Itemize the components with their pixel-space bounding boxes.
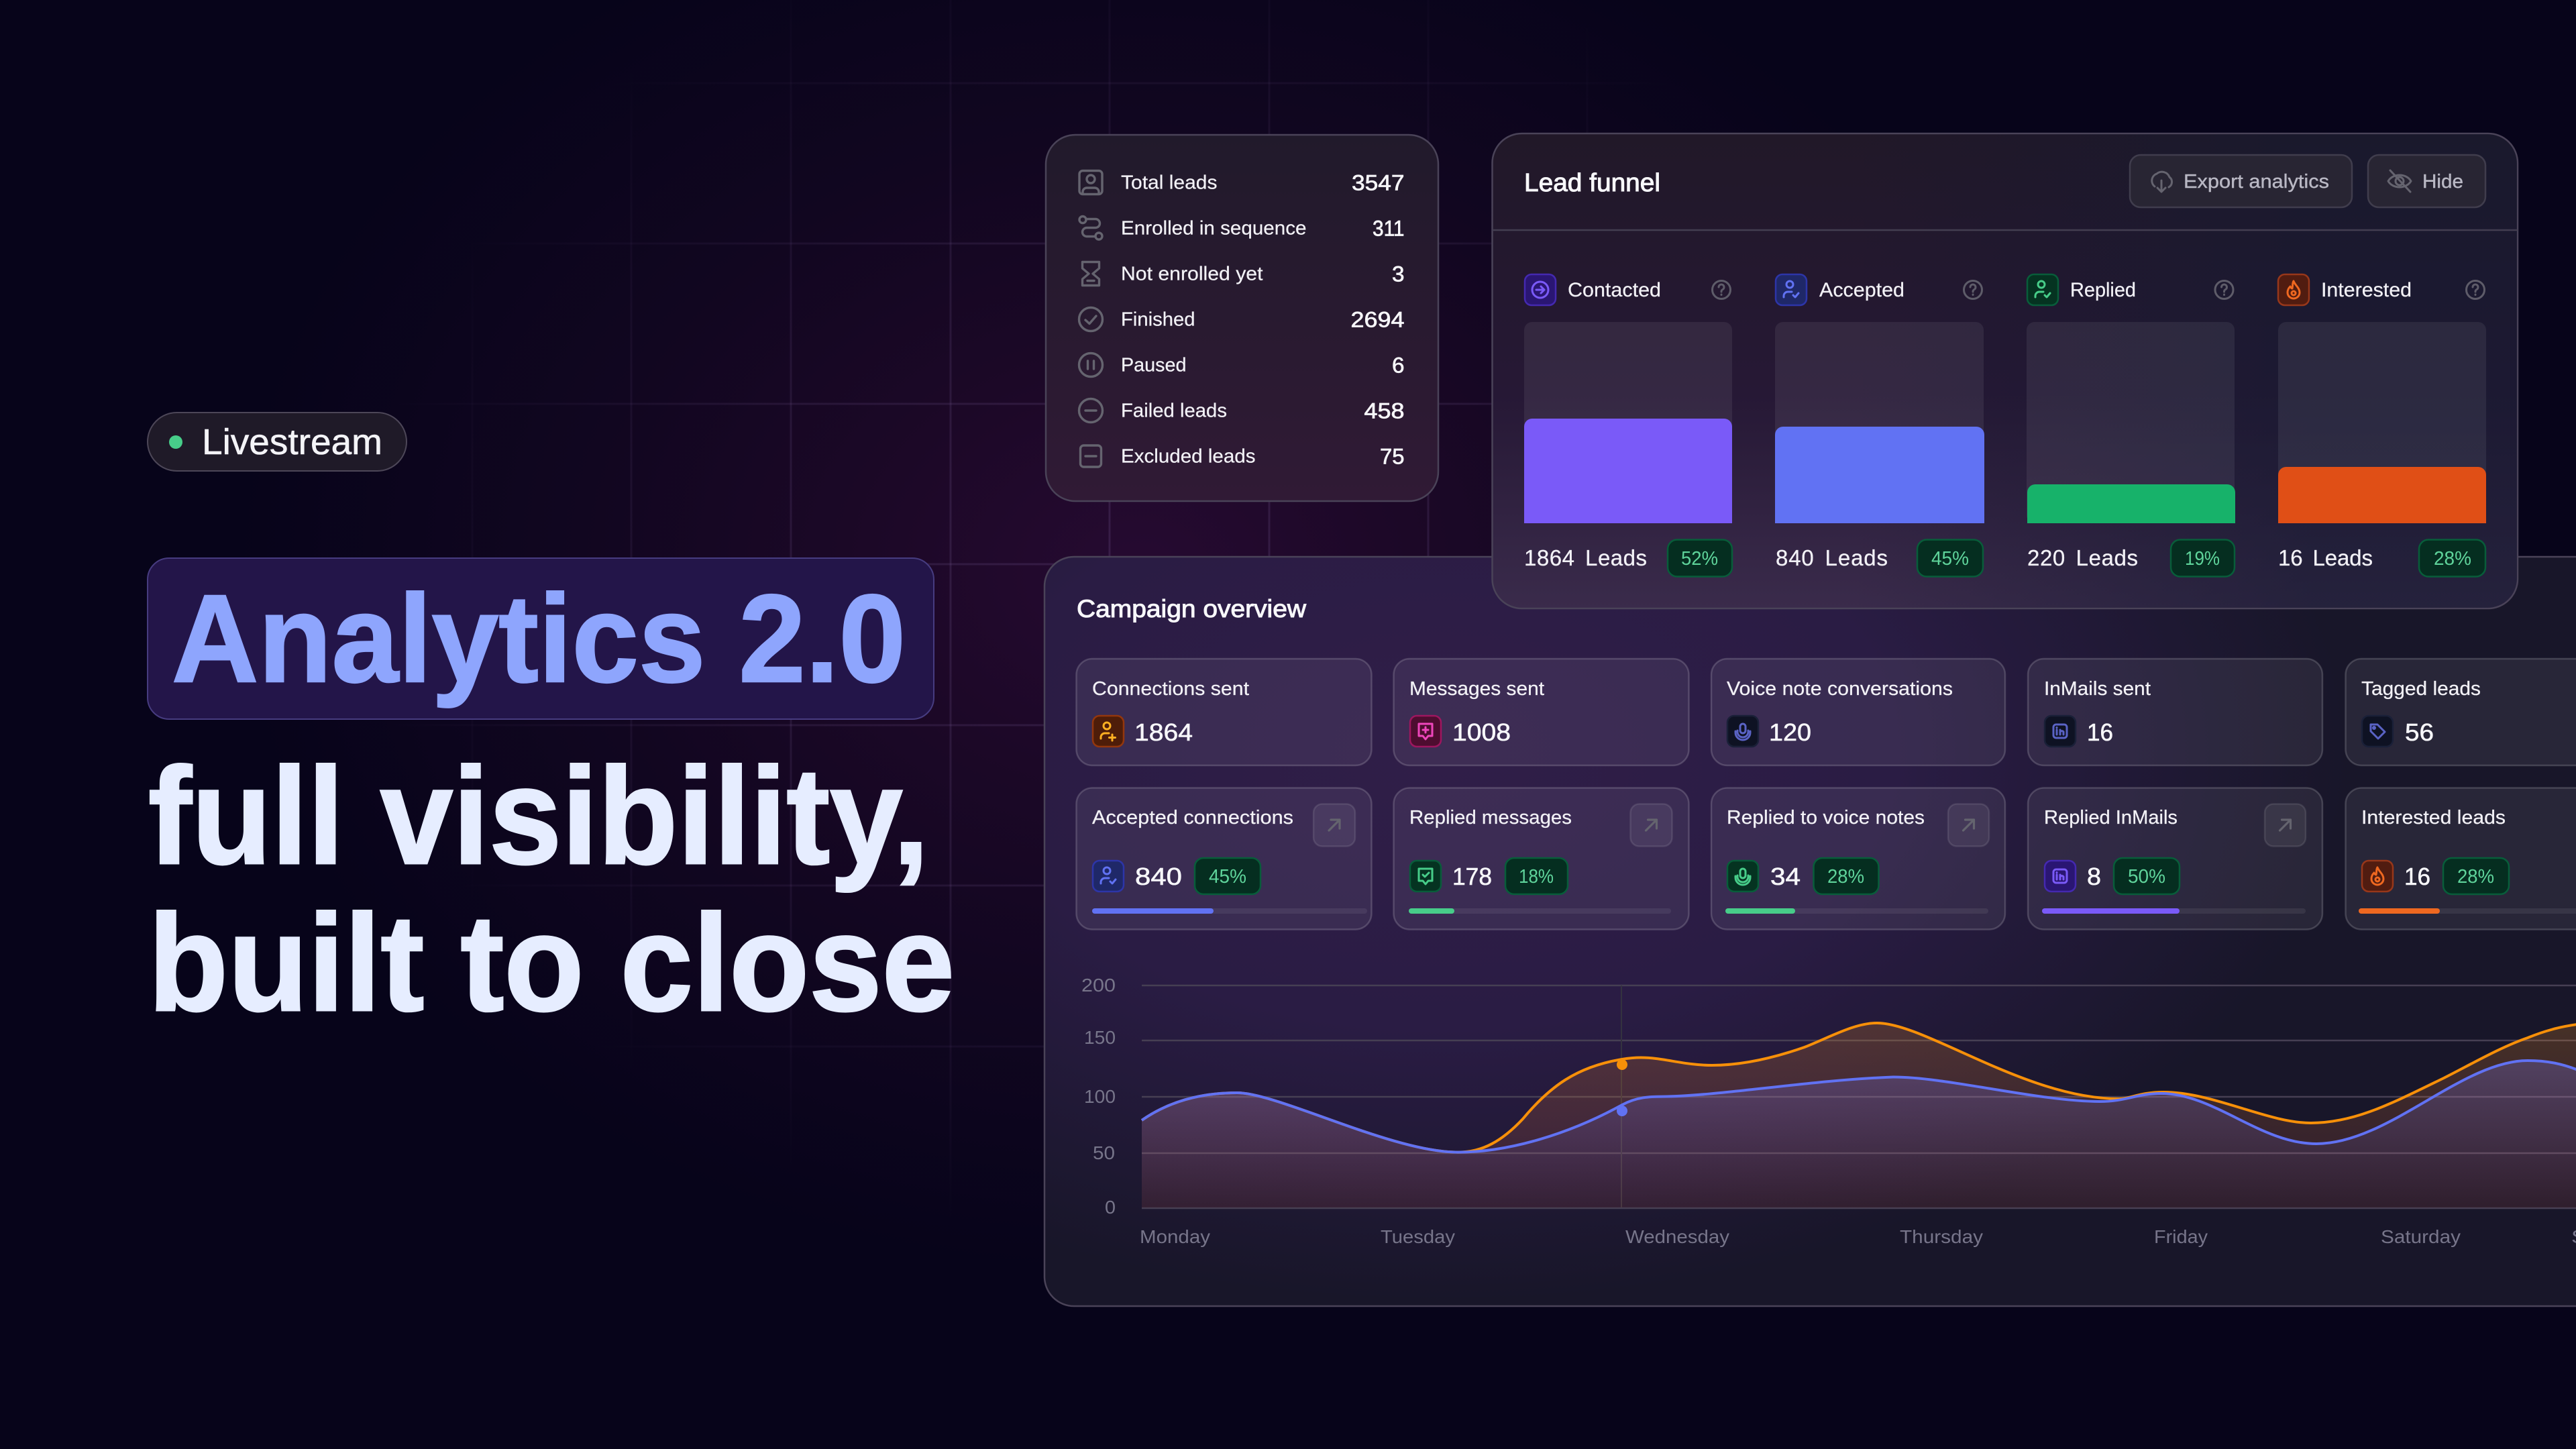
x axis labels: Friday — [2154, 1226, 2208, 1247]
card: interested leads: 16 — [2404, 863, 2430, 890]
card: connections sent: 1864 — [1134, 718, 1193, 746]
card: connections sent: Connections sent — [1092, 678, 1249, 700]
funnel column: replied — [2027, 274, 2235, 577]
card: replied inmails: 50% — [2128, 866, 2165, 888]
row: finished — [1079, 307, 1405, 331]
card: replied to voice notes: Replied to voice notes — [1727, 807, 1925, 828]
funnel column: replied: 220 Leads — [2027, 545, 2138, 570]
card: messages sent: Messages sent — [1409, 678, 1544, 700]
orange series line — [1142, 1023, 2576, 1152]
card: accepted connections — [1076, 788, 1371, 930]
blue data point — [1617, 1106, 1627, 1116]
headline line 1: full visibility, — [148, 739, 929, 893]
row: excluded leads: 75 — [1380, 444, 1405, 468]
card: tagged leads: Tagged leads — [2361, 678, 2481, 700]
row: paused: Paused — [1121, 354, 1186, 376]
row: total leads: Total leads — [1121, 172, 1217, 193]
row: enrolled in sequence — [1079, 216, 1405, 240]
panel: lead funnel — [1492, 133, 2518, 608]
row: finished: 2694 — [1351, 307, 1405, 331]
row: enrolled in sequence: Enrolled in sequence — [1121, 217, 1307, 239]
y axis labels: 100 — [1084, 1086, 1116, 1107]
funnel column: interested — [2278, 274, 2486, 577]
row: not enrolled yet: Not enrolled yet — [1121, 263, 1263, 284]
card: replied to voice notes: 28% — [1827, 866, 1864, 888]
funnel column: accepted: 840 Leads — [1776, 545, 1888, 570]
funnel column: replied: 19% — [2185, 548, 2220, 570]
card: replied inmails — [2028, 788, 2322, 930]
card: replied messages: Replied messages — [1409, 807, 1572, 828]
button: export analytics: Export analytics — [2184, 171, 2329, 193]
card: replied messages: 178 — [1452, 863, 1492, 890]
funnel column: replied: Replied — [2070, 279, 2136, 301]
card: interested leads — [2345, 788, 2576, 930]
livestream pill — [148, 413, 407, 471]
card: replied messages: 18% — [1519, 866, 1554, 888]
card: connections sent — [1076, 659, 1371, 765]
row: failed leads: 458 — [1364, 398, 1405, 423]
row: not enrolled yet — [1083, 262, 1405, 286]
funnel column: contacted: 52% — [1681, 548, 1718, 570]
heading: campaign overview: Campaign overview — [1077, 595, 1306, 623]
card: replied inmails: 8 — [2087, 863, 2101, 890]
livestream pill: Livestream — [202, 422, 382, 462]
card: voice note conversations: Voice note conversations — [1727, 678, 1953, 700]
funnel column: interested: 16 Leads — [2278, 545, 2373, 570]
row: failed leads — [1079, 398, 1405, 423]
funnel column: interested: 28% — [2434, 548, 2471, 570]
x axis labels — [1140, 1226, 2576, 1247]
card: messages sent — [1394, 659, 1689, 765]
row: excluded leads — [1080, 444, 1405, 468]
card: tagged leads — [2345, 659, 2576, 765]
card: accepted connections: 840 — [1135, 863, 1182, 890]
card: replied to voice notes — [1711, 788, 2005, 930]
card: inmails sent: 16 — [2087, 718, 2113, 746]
card: replied messages — [1394, 788, 1689, 930]
funnel column: accepted: Accepted — [1819, 279, 1904, 301]
panel: campaign overview — [1044, 557, 2576, 1306]
funnel column: contacted: 1864 Leads — [1524, 545, 1647, 570]
y axis labels: 0 — [1105, 1197, 1116, 1218]
funnel column: accepted — [1775, 274, 1984, 577]
highlighted title: Analytics 2.0: Analytics 2.0 — [172, 570, 906, 708]
x axis labels: Wednesday — [1625, 1226, 1729, 1247]
blue series line — [1142, 1061, 2576, 1152]
y axis labels: 150 — [1084, 1027, 1116, 1048]
x axis labels: Monday — [1140, 1226, 1210, 1247]
funnel column: contacted — [1524, 274, 1732, 577]
button: hide — [2368, 155, 2485, 207]
row: finished: Finished — [1121, 309, 1195, 330]
headline line 2: built to close — [148, 886, 955, 1040]
card: interested leads: 28% — [2457, 866, 2494, 888]
card: accepted connections: 45% — [1209, 866, 1246, 888]
x axis labels: Tuesday — [1381, 1226, 1455, 1247]
row: paused: 6 — [1392, 353, 1405, 377]
card: voice note conversations — [1711, 659, 2005, 765]
funnel column: interested: Interested — [2321, 279, 2412, 301]
card: messages sent: 1008 — [1452, 718, 1511, 746]
funnel column: accepted: 45% — [1931, 548, 1969, 570]
card: inmails sent — [2028, 659, 2322, 765]
card: voice note conversations: 120 — [1769, 718, 1811, 746]
panel: lead stats list — [1046, 135, 1438, 501]
row: enrolled in sequence: 311 — [1373, 216, 1405, 240]
x axis labels: Thursday — [1900, 1226, 1983, 1247]
row: paused — [1079, 353, 1405, 377]
card: replied to voice notes: 34 — [1770, 863, 1801, 890]
y axis labels — [1081, 975, 1116, 1218]
row: excluded leads: Excluded leads — [1121, 445, 1256, 467]
row: failed leads: Failed leads — [1121, 400, 1227, 421]
x axis labels: Saturday — [2381, 1226, 2461, 1247]
orange data point — [1617, 1059, 1627, 1070]
y axis labels: 50 — [1093, 1142, 1115, 1163]
row: total leads: 3547 — [1352, 170, 1405, 195]
hero heading block — [148, 413, 955, 1040]
button: hide: Hide — [2422, 171, 2463, 193]
card: replied inmails: Replied InMails — [2044, 807, 2178, 828]
card: interested leads: Interested leads — [2361, 807, 2506, 828]
button: export analytics — [2130, 155, 2352, 207]
card: inmails sent: InMails sent — [2044, 678, 2151, 700]
orange series area — [1142, 1023, 2576, 1208]
blue series area — [1142, 1061, 2576, 1208]
heading: lead funnel: Lead funnel — [1524, 169, 1660, 197]
row: total leads — [1079, 170, 1405, 195]
area line chart — [1081, 975, 2576, 1247]
card: tagged leads: 56 — [2405, 718, 2434, 746]
card: accepted connections: Accepted connections — [1092, 807, 1293, 828]
row: not enrolled yet: 3 — [1392, 262, 1405, 286]
funnel column: contacted: Contacted — [1568, 279, 1661, 301]
y axis labels: 200 — [1081, 975, 1116, 996]
